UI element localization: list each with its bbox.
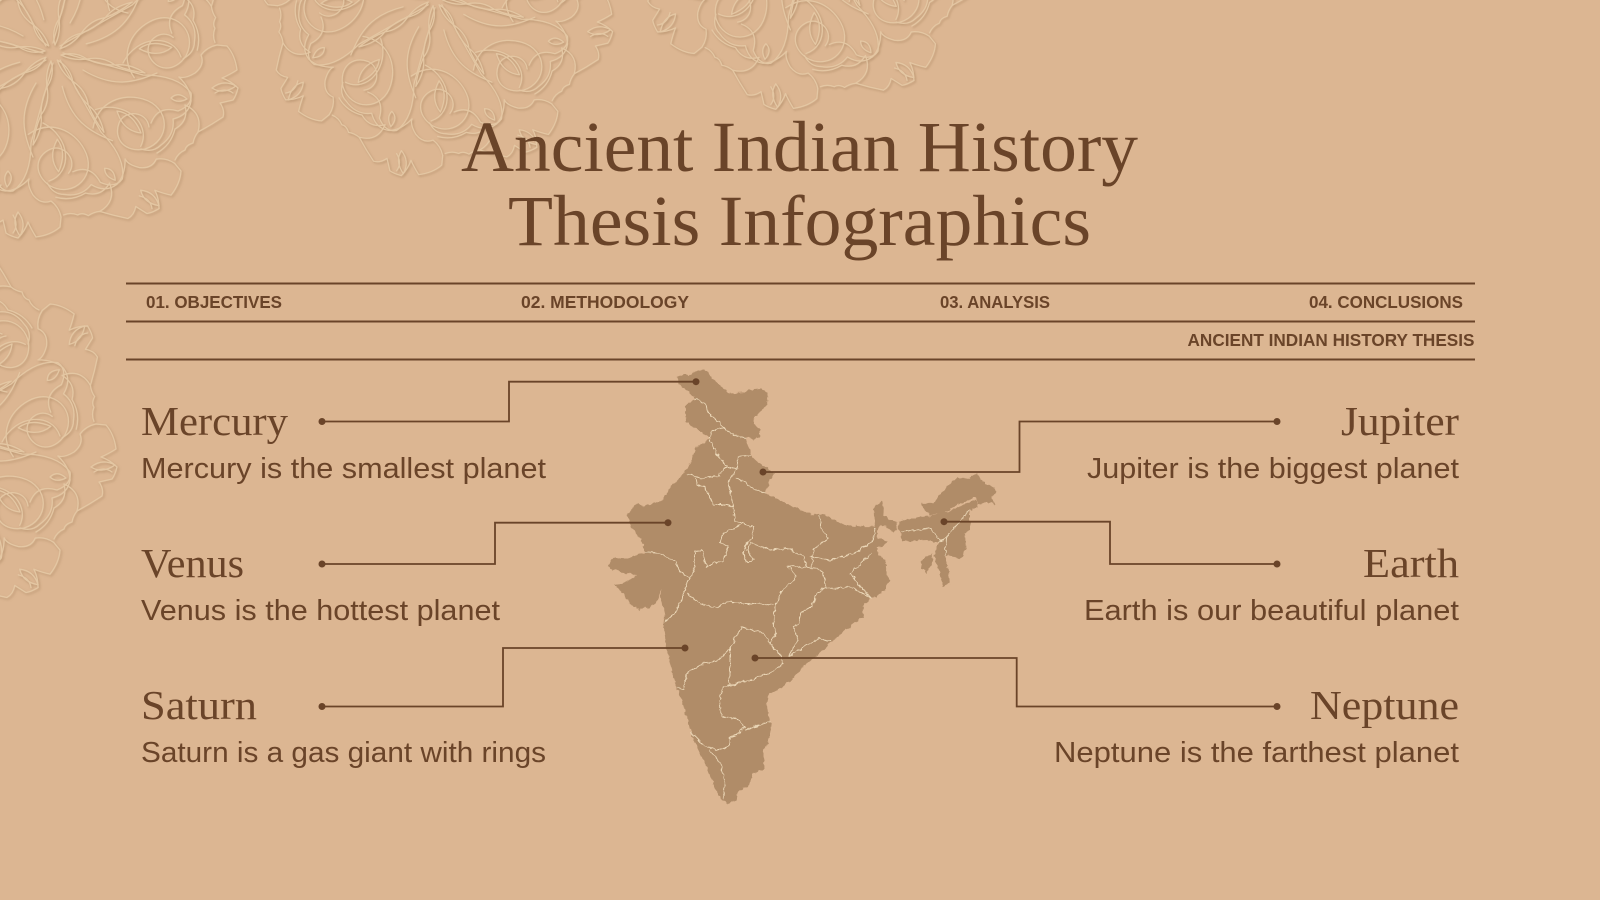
label: Jupiter: Jupiter [1341,398,1459,444]
label: Earth [1084,540,1459,627]
decorative mandala: top centre [608,0,1012,130]
title: Ancient Indian History [461,107,1138,187]
connector: Earth [940,518,1280,568]
map of India [608,369,997,804]
decorative mandala: top left [0,0,259,259]
connector: Neptune [752,654,1280,710]
state borders [645,398,970,798]
label: Saturn: Saturn [141,682,257,728]
title [461,107,1138,261]
label: Earth: Earth is our beautiful planet [1084,595,1459,627]
label: Earth: Earth [1363,540,1459,586]
label: Mercury [141,398,546,485]
label: Saturn: Saturn is a gas giant with rings [141,737,546,769]
navigation header: 01. OBJECTIVES [146,292,282,312]
connector: Venus [318,519,672,568]
decorative mandala: top centre-left [237,0,633,196]
label: Neptune: Neptune [1310,682,1459,728]
label: Venus [141,540,500,627]
label: Neptune [1054,682,1459,769]
title: Thesis Infographics [508,181,1091,261]
label: Mercury: Mercury [141,398,289,444]
navigation header: ANCIENT INDIAN HISTORY THESIS [1188,330,1474,350]
decorative mandala: left edge [0,226,138,638]
connector: Mercury [318,378,700,425]
navigation header: 03. ANALYSIS [940,292,1050,312]
label: Venus: Venus [141,540,244,586]
label: Jupiter [1087,398,1459,485]
label: Venus: Venus is the hottest planet [141,595,500,627]
label: Mercury: Mercury is the smallest planet [141,453,546,485]
navigation header: 02. METHODOLOGY [521,292,689,312]
navigation header: 04. CONCLUSIONS [1309,292,1463,312]
label: Saturn [141,682,546,769]
connector: Saturn [318,644,688,710]
label: Neptune: Neptune is the farthest planet [1054,737,1459,769]
navigation header [126,282,1475,360]
label: Jupiter: Jupiter is the biggest planet [1087,453,1459,485]
connector: Jupiter [760,418,1280,476]
